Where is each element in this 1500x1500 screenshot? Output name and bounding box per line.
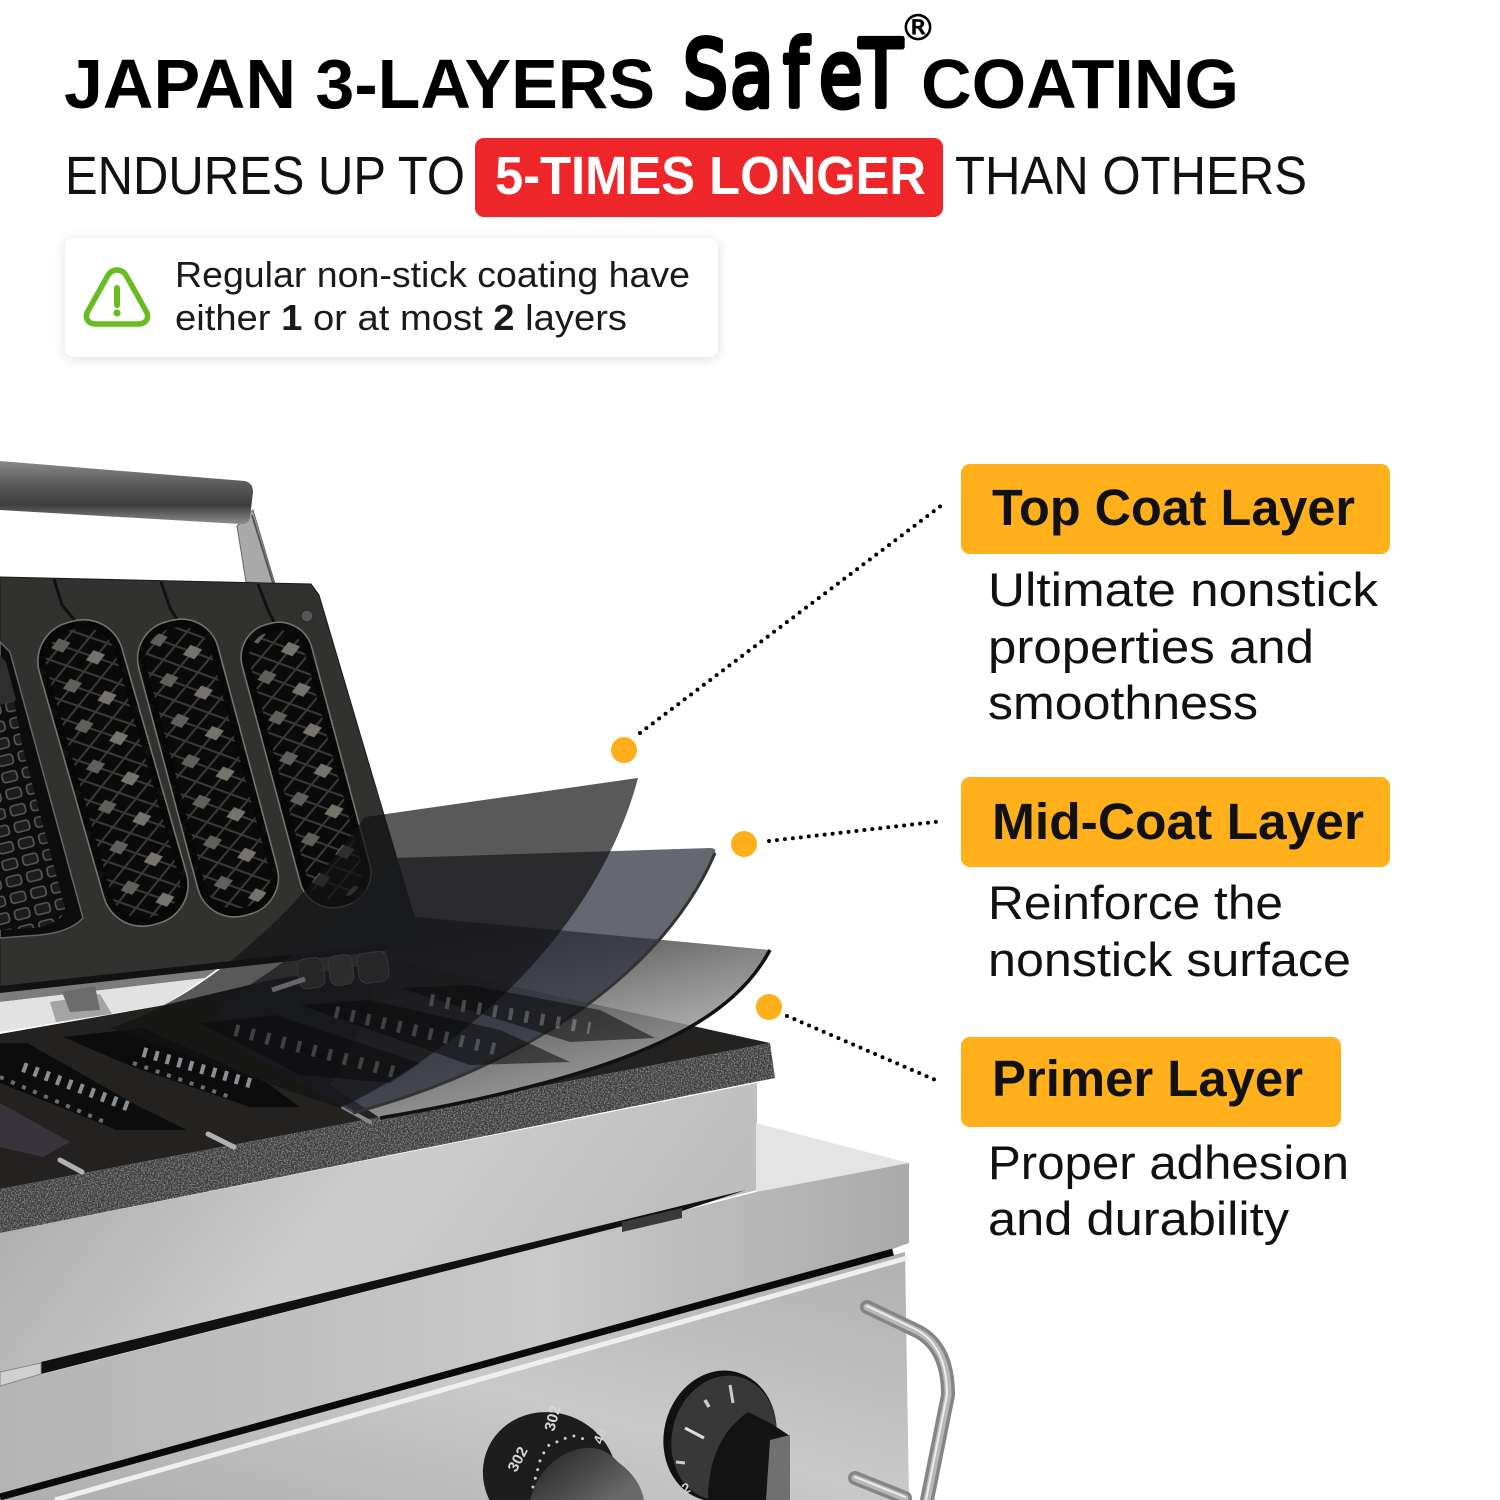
panel: mid-coat layer bbox=[961, 777, 1390, 986]
lower waffle plate bbox=[0, 960, 770, 1189]
timer dial right: 2 bbox=[680, 1479, 693, 1497]
description: Ultimate nonstick bbox=[988, 563, 1379, 616]
description: and durability bbox=[988, 1192, 1290, 1245]
temperature dial left: 302 bbox=[505, 1444, 532, 1475]
label text: Mid-Coat Layer bbox=[992, 793, 1364, 850]
subtitle line bbox=[65, 138, 1307, 217]
primer layer sheet bbox=[330, 915, 770, 1118]
title line 1 bbox=[64, 8, 1239, 129]
description bbox=[988, 1136, 1349, 1245]
lower chassis bbox=[0, 1043, 909, 1500]
note line 1: Regular non-stick coating have bbox=[175, 254, 690, 295]
shiny gap segment bbox=[0, 1363, 41, 1386]
mid-coat layer sheet bbox=[215, 848, 715, 1113]
plate slot front bbox=[200, 1015, 420, 1083]
waffle machine bbox=[0, 461, 948, 1500]
gap shadow line bbox=[41, 1190, 746, 1374]
icon: warning triangle bbox=[86, 270, 148, 324]
label badge bbox=[961, 777, 1390, 867]
plate slot ridged 1 bbox=[63, 1028, 300, 1107]
glossy slot bbox=[0, 1103, 70, 1157]
description: nonstick surface bbox=[988, 933, 1351, 986]
waffle slot A bbox=[28, 610, 198, 936]
lid body bbox=[0, 577, 418, 989]
lid handle bbox=[0, 461, 275, 584]
card background bbox=[65, 238, 718, 357]
black seam bbox=[0, 1252, 893, 1497]
primer sheet edge bbox=[380, 950, 770, 1118]
lid bolt bbox=[301, 610, 313, 622]
ghosted plate details seen through sheets bbox=[200, 950, 655, 1083]
plate slot rear bbox=[400, 985, 655, 1042]
callout connectors bbox=[611, 502, 946, 1082]
description: Proper adhesion bbox=[988, 1136, 1349, 1189]
top coat layer sheet bbox=[110, 778, 638, 1108]
lid grooves bbox=[54, 579, 276, 626]
plate surface bbox=[0, 960, 770, 1189]
lower control panel bbox=[0, 1252, 909, 1500]
red highlight badge bbox=[475, 138, 943, 217]
dotted connector: mid coat bbox=[769, 821, 943, 841]
timer dial right bbox=[650, 1358, 790, 1500]
marker: primer bbox=[756, 994, 782, 1020]
lid bottom edge bbox=[0, 941, 416, 993]
note card bbox=[65, 238, 718, 357]
badge text: 5-TIMES LONGER bbox=[495, 146, 926, 206]
waffle slot C bbox=[233, 615, 379, 915]
plate slot ridged 2 bbox=[0, 1043, 187, 1130]
hinge barrels bbox=[272, 950, 390, 990]
gap slider bbox=[622, 1208, 682, 1232]
temperature dial left: 48 bbox=[590, 1426, 610, 1446]
temperature dial left bbox=[462, 1390, 644, 1500]
description: smoothness bbox=[988, 676, 1258, 729]
description bbox=[988, 563, 1379, 729]
label badge bbox=[961, 1037, 1341, 1127]
silver hinge bracket bbox=[0, 963, 225, 1032]
description bbox=[988, 876, 1351, 986]
subtitle start: ENDURES UP TO bbox=[65, 146, 465, 206]
registered mark: ® bbox=[900, 8, 936, 49]
label badge bbox=[961, 464, 1390, 554]
brand logo: SafeT: SafeT bbox=[683, 22, 903, 129]
dotted connector: top coat bbox=[640, 502, 946, 733]
description: properties and bbox=[988, 620, 1314, 673]
upper lid plate bbox=[0, 577, 418, 993]
panel: top coat layer bbox=[961, 464, 1390, 729]
upper body face bbox=[0, 1083, 757, 1385]
subtitle end: THAN OTHERS bbox=[955, 146, 1307, 206]
chrome strip bbox=[55, 1258, 907, 1500]
temperature dial left: 302 bbox=[541, 1404, 565, 1433]
plate slot middle bbox=[300, 1000, 570, 1065]
dotted connector: primer bbox=[787, 1016, 940, 1082]
side handle bbox=[855, 1306, 948, 1500]
description: Reinforce the bbox=[988, 876, 1283, 929]
tray inner flap bbox=[756, 1123, 909, 1192]
panel: primer layer bbox=[961, 1037, 1349, 1245]
note line 2: either 1 or at most 2 layers bbox=[175, 297, 627, 338]
marker: top coat bbox=[611, 737, 637, 763]
label text: Primer Layer bbox=[992, 1050, 1303, 1107]
front clips bbox=[60, 1107, 370, 1172]
tray front band bbox=[0, 1163, 909, 1497]
left waffle slot bbox=[0, 642, 83, 938]
waffle slot B bbox=[129, 611, 287, 925]
heading: Japan 3-layers: JAPAN 3-LAYERS bbox=[64, 45, 655, 123]
coating sheets bbox=[110, 778, 770, 1118]
marker: mid coat bbox=[731, 831, 757, 857]
mid-coat sheet edge bbox=[353, 853, 715, 1113]
rim textured bbox=[0, 1043, 775, 1233]
heading: coating: COATING bbox=[921, 45, 1239, 123]
label text: Top Coat Layer bbox=[992, 479, 1355, 536]
